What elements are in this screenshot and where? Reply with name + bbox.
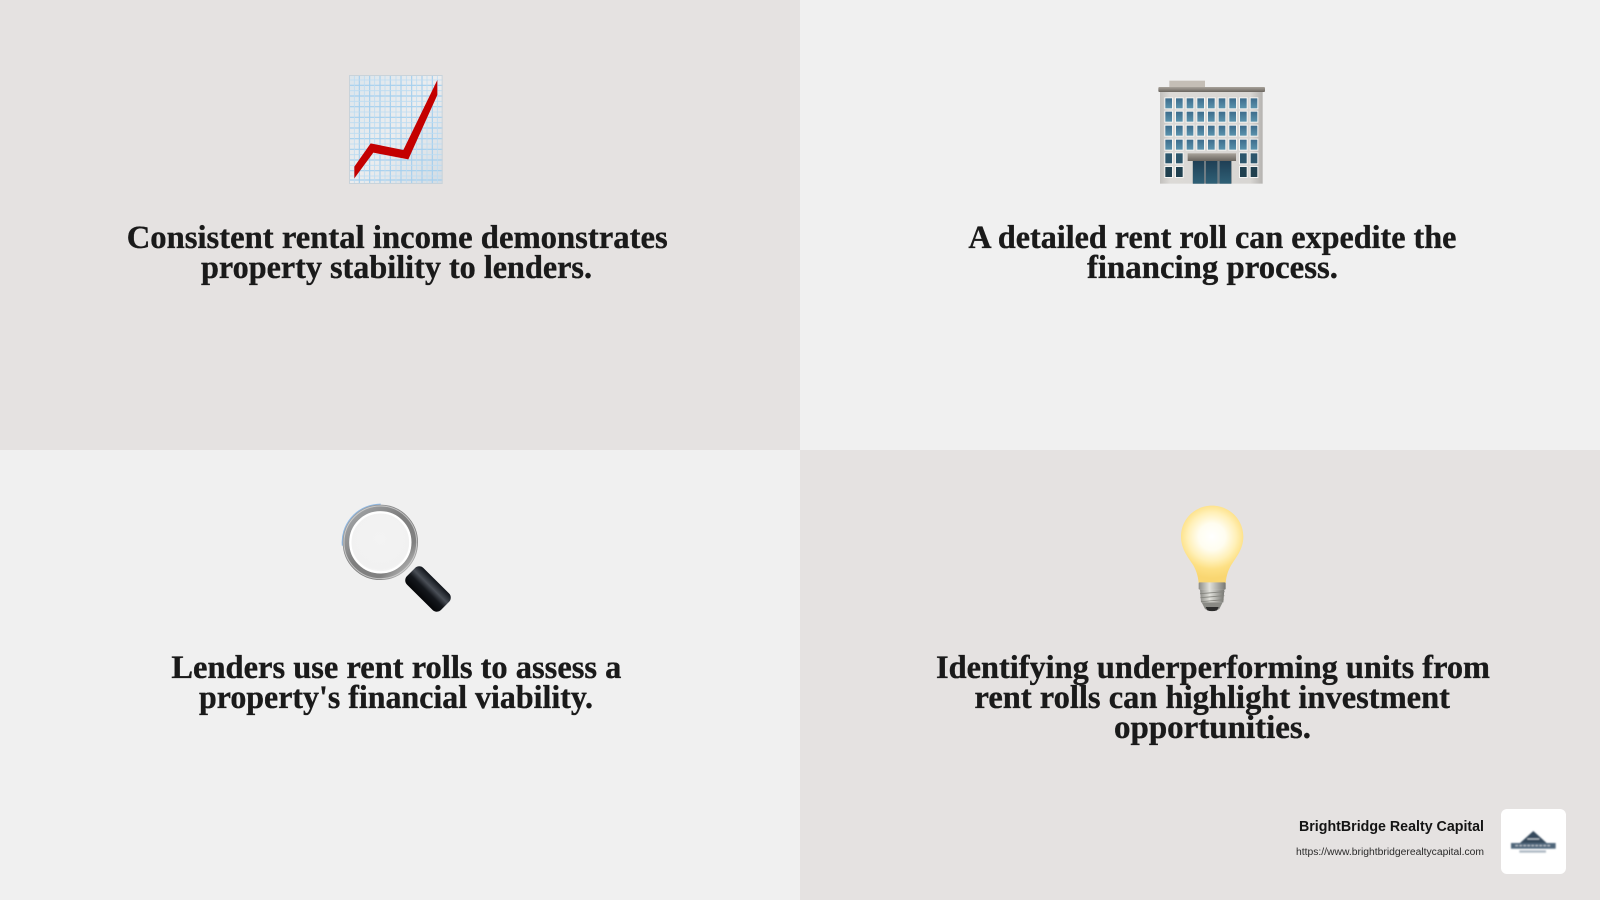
heading: consistent rental income: Consistent rental income demonstrates [127,220,668,256]
panel: detailed rent roll [800,0,1600,450]
company url: https://www.brightbridgerealtycapital.com [1296,847,1484,858]
panel: consistent rental income [0,0,800,450]
logo card [1501,809,1566,874]
panel: lenders assess viability [0,450,800,900]
heading: detailed rent roll: A detailed rent roll can expedite the [968,220,1456,256]
heading: detailed rent roll: financing process. [1087,250,1338,286]
heading: underperforming units: opportunities. [1114,710,1311,746]
icon: rising chart [349,75,443,184]
heading: lenders assess viability: property's financial viability. [199,680,593,716]
heading: lenders assess viability: Lenders use rent rolls to assess a [171,650,621,686]
brand footer [1296,809,1566,874]
icon: office building [1158,81,1265,184]
icon: magnifying glass [339,501,453,614]
heading: consistent rental income: property stability to lenders. [201,250,592,286]
icon: light bulb [1181,506,1243,611]
heading: underperforming units: rent rolls can highlight investment [974,680,1450,716]
panel: underperforming units [800,450,1600,900]
heading: underperforming units: Identifying underperforming units from [936,650,1490,686]
company name: BrightBridge Realty Capital [1299,819,1484,835]
